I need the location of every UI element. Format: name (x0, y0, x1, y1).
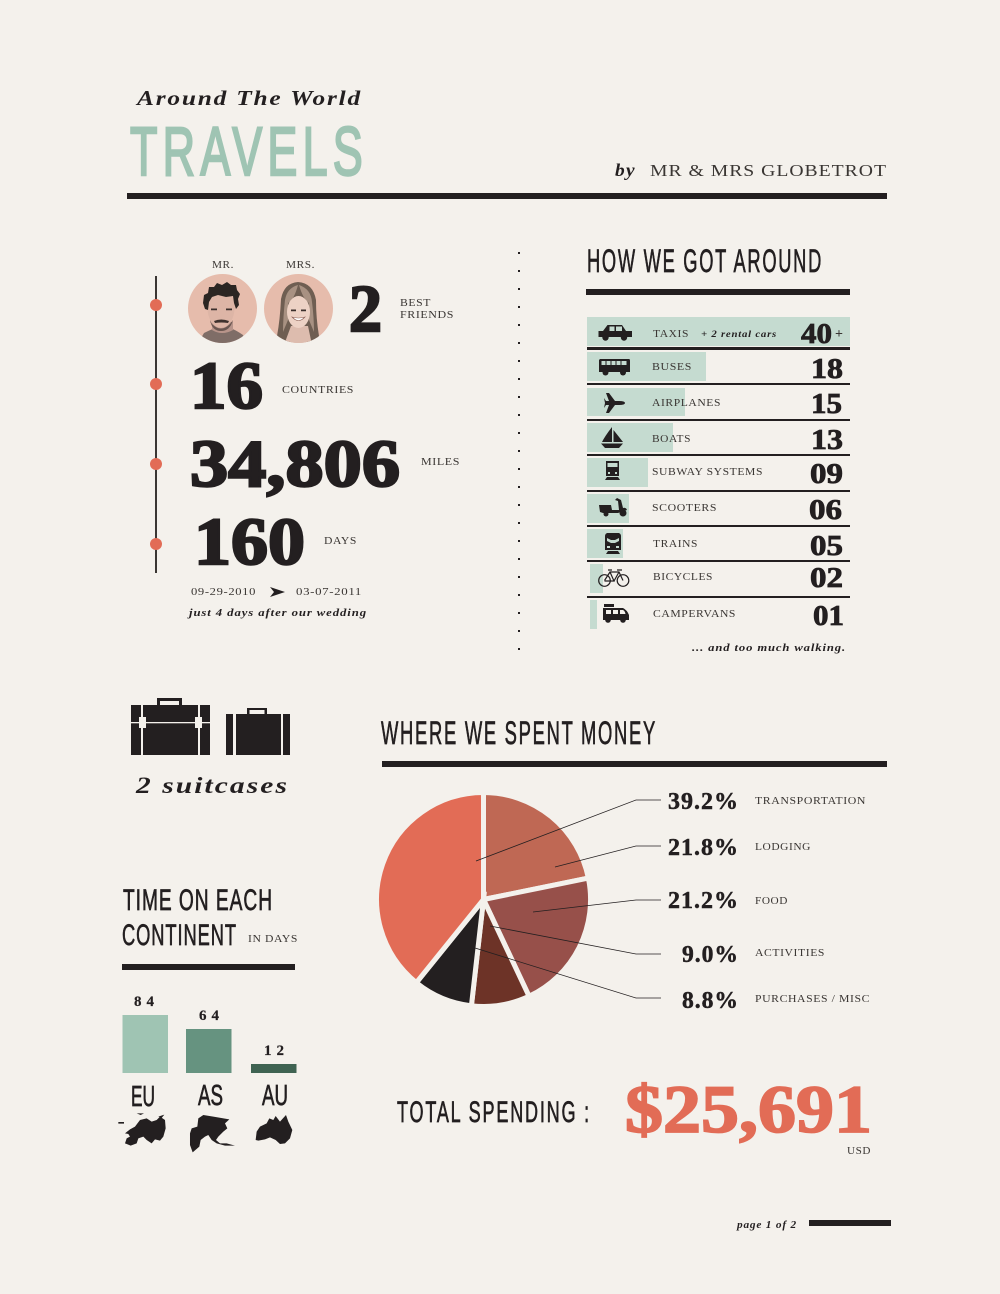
dates: 03-07-2011 (296, 586, 362, 598)
panel: where we spent money (377, 715, 887, 1157)
subtitle: Around The World (135, 86, 362, 110)
legend: transportation: TRANSPORTATION (755, 795, 866, 807)
icon: sailboat (601, 427, 623, 448)
label: mr: MR. (212, 260, 234, 271)
icon: europe map (118, 1113, 166, 1146)
row: subway systems: SUBWAY SYSTEMS (652, 466, 763, 478)
heading (122, 884, 298, 970)
dates (191, 586, 362, 598)
row: subway systems: 09 (810, 458, 843, 490)
row: campervans: CAMPERVANS (653, 608, 736, 620)
row: bicycles (587, 562, 850, 598)
legend: transportation: 39.2% (668, 789, 739, 815)
stat: countries (190, 349, 354, 423)
note: just 4 days after our wedding (187, 607, 367, 619)
legend: activities: 9.0% (682, 942, 739, 968)
icon: airplane (604, 393, 625, 413)
page number: page 1 of 2 (736, 1220, 797, 1231)
row: boats (587, 423, 850, 456)
note: walking: ... and too much walking. (692, 642, 846, 654)
timeline line and dots (150, 276, 162, 573)
total spending (397, 1071, 872, 1157)
icon: small suitcase (226, 708, 290, 755)
legend: lodging: 21.8% (668, 835, 739, 861)
heading: IN DAYS (248, 934, 298, 945)
row: campervans (590, 600, 844, 632)
row: taxis: + 2 rental cars (701, 330, 777, 340)
row: taxis: TAXIS (653, 328, 689, 340)
heading: TIME ON EACH (123, 884, 273, 917)
row: trains: TRAINS (653, 538, 698, 550)
icon: campervan (603, 604, 629, 623)
row: scooters: SCOOTERS (652, 502, 717, 514)
bar: asia (186, 1008, 235, 1152)
legend: purchases: PURCHASES / MISC (755, 993, 870, 1005)
stat: countries: 16 (190, 349, 263, 423)
stat: miles: 34,806 (190, 427, 400, 501)
legend: transportation (668, 789, 866, 815)
bar: australia: AU (262, 1080, 288, 1112)
legend: food (668, 888, 788, 914)
heading (381, 715, 887, 767)
total spending: $25,691 (625, 1071, 872, 1147)
dates: 09-29-2010 (191, 586, 256, 598)
byline: by (615, 160, 636, 180)
row: taxis: 40 (801, 318, 832, 350)
bar: asia: AS (198, 1080, 223, 1112)
legend: activities: ACTIVITIES (755, 947, 825, 959)
row: taxis (587, 317, 850, 350)
legend: food: FOOD (755, 895, 788, 907)
page number (736, 1220, 891, 1231)
row: scooters (587, 494, 850, 527)
row: airplanes: 15 (811, 388, 842, 420)
row: airplanes (587, 388, 850, 421)
portrait: mr (188, 274, 257, 345)
stat: best friends: FRIENDS (400, 309, 454, 321)
icon: australia map (256, 1115, 292, 1144)
legend: activities (682, 942, 825, 968)
row: scooters: 06 (809, 494, 842, 526)
stat: best friends: BEST (400, 297, 431, 309)
legend: purchases: 8.8% (682, 988, 739, 1014)
leader lines (475, 800, 661, 998)
icon: car (598, 325, 632, 341)
icon: subway (605, 461, 620, 480)
row: trains (587, 529, 850, 562)
stat: best friends: 2 (349, 272, 382, 346)
row: trains: 05 (810, 530, 843, 562)
row: subway systems (587, 458, 850, 492)
icon: scooter (599, 498, 627, 516)
bar: australia (251, 1043, 296, 1144)
bar: europe (118, 994, 168, 1146)
total spending: TOTAL SPENDING : (397, 1096, 591, 1129)
legend: lodging (668, 835, 811, 861)
icon: bus (599, 359, 630, 376)
stat: best friends (349, 272, 454, 346)
panel: how we got around (586, 243, 850, 654)
row: buses (587, 352, 850, 385)
icon: bicycle (599, 570, 629, 586)
icon: asia map (190, 1115, 235, 1152)
row: buses: 18 (811, 353, 843, 385)
row: bicycles: BICYCLES (653, 571, 713, 583)
row: airplanes: AIRPLANES (652, 397, 721, 409)
heading: CONTINENT (122, 919, 237, 952)
panel: time on each continent (118, 884, 298, 1152)
stat: miles (190, 427, 460, 501)
row: taxis: + (835, 327, 844, 342)
title: TRAVELS (130, 113, 368, 190)
bar: asia: 64 (199, 1008, 220, 1024)
heading: HOW WE GOT AROUND (587, 243, 823, 279)
row: bicycles: 02 (810, 562, 843, 594)
total spending: USD (847, 1145, 871, 1157)
legend: food: 21.2% (668, 888, 739, 914)
row: campervans: 01 (813, 600, 844, 632)
header (127, 86, 887, 199)
legend: purchases (682, 988, 870, 1014)
row: boats: 13 (811, 424, 843, 456)
heading: WHERE WE SPENT MONEY (381, 715, 657, 751)
stat: countries: COUNTRIES (282, 384, 354, 396)
row: boats: BOATS (652, 433, 691, 445)
panel: stats timeline (150, 260, 460, 619)
row: buses: BUSES (652, 361, 692, 373)
panel: suitcases (131, 698, 290, 798)
stat: days: DAYS (324, 535, 357, 547)
bar: australia: 12 (264, 1043, 284, 1059)
stat: days (194, 505, 357, 579)
heading (586, 243, 850, 295)
stat: miles: MILES (421, 456, 460, 468)
icon: large suitcase (131, 698, 210, 755)
byline: MR & MRS GLOBETROT (650, 161, 887, 180)
stat: days: 160 (194, 505, 305, 579)
legend: lodging: LODGING (755, 841, 811, 853)
icon: train (605, 533, 621, 554)
bar: europe: EU (131, 1081, 155, 1113)
pie chart (377, 792, 591, 1006)
label: mrs: MRS. (286, 260, 315, 271)
label: 2 suitcases (135, 773, 289, 798)
portrait: mrs (264, 274, 333, 345)
bar: europe: 84 (134, 994, 154, 1010)
